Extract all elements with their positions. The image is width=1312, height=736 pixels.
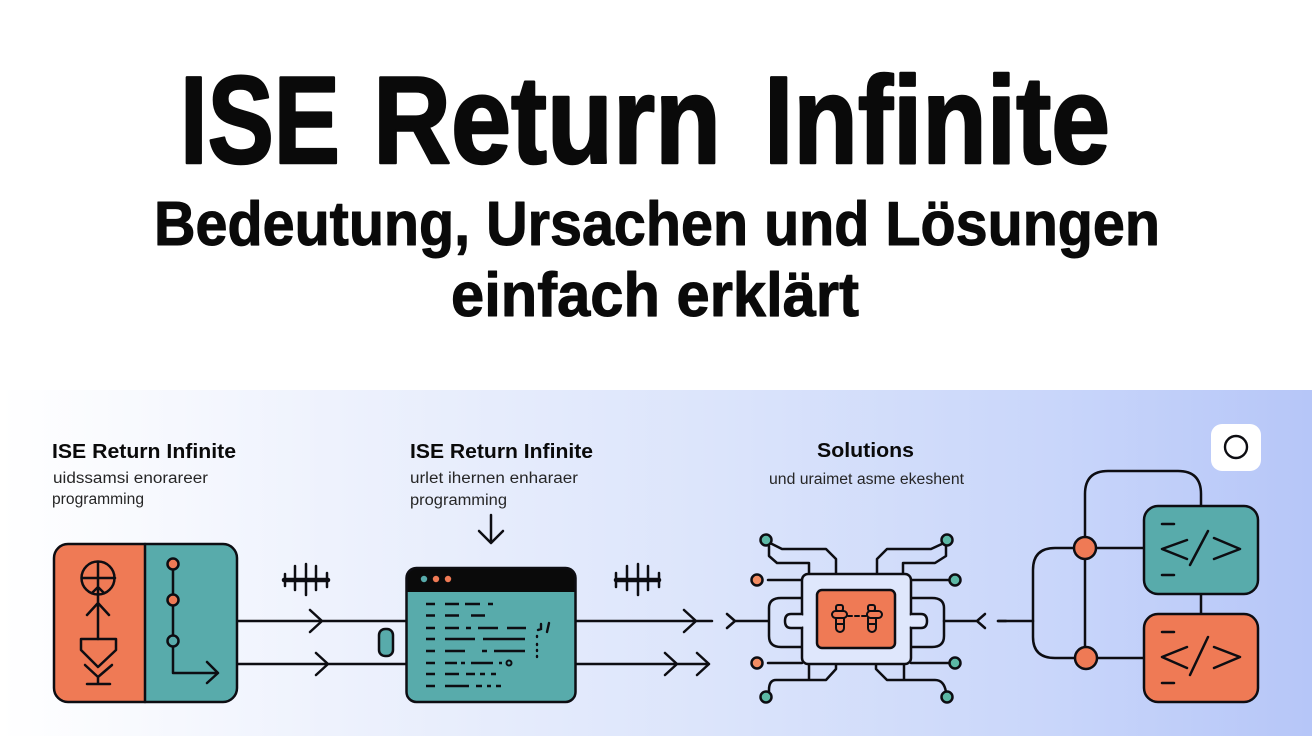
chip side notches [785,614,927,628]
chip core glyph [832,605,882,632]
step 1 label: programming [52,491,144,508]
step 3 label: und uraimet asme ekeshent [769,471,965,488]
step 2 label [410,441,593,509]
step 1 label: uidssamsi enorareer [53,470,208,487]
step 1 label [52,441,236,508]
step 3 label: Solutions [817,440,914,462]
title: Infinite [764,52,1110,190]
icon: crosshair flow [81,562,116,684]
chip nodes [752,534,960,702]
title: Return [373,52,721,190]
connector arrows from panel 1 to panel 2 [237,610,407,675]
panel: code cards network [998,424,1261,702]
chip body [802,574,911,664]
status badge [1211,424,1261,471]
code lines [426,604,526,686]
icon: signal mark left [284,564,328,595]
icon: path with nodes [168,558,218,683]
panel: code window [406,567,576,702]
chip core [817,590,895,648]
network lines [998,471,1201,658]
subtitle line 1: Bedeutung, Ursachen und Lösungen [154,190,1160,259]
step 2 label: urlet ihernen enharaer [410,470,578,487]
title [180,52,1110,190]
panel: split diagram [54,544,237,702]
step 1 label: ISE Return Infinite [52,441,236,463]
icon: signal mark right [616,564,659,595]
nodes [1074,537,1097,669]
window buttons [421,576,451,582]
card: teal code [1144,506,1258,594]
step 2 label: ISE Return Infinite [410,441,593,463]
chip traces [727,543,1006,696]
code marks [537,623,549,657]
step 3 label [769,440,965,488]
connector pill [379,629,393,656]
card: orange code [1144,614,1258,702]
step 2 label: programming [410,492,507,509]
background band [0,390,1312,736]
connector arrows from panel 2 to chip [576,610,712,675]
panel: chip diagram [727,534,1006,702]
subtitle line 2: einfach erklärt [451,261,859,330]
title: ISE [180,52,340,190]
icon: down arrow [479,515,503,543]
